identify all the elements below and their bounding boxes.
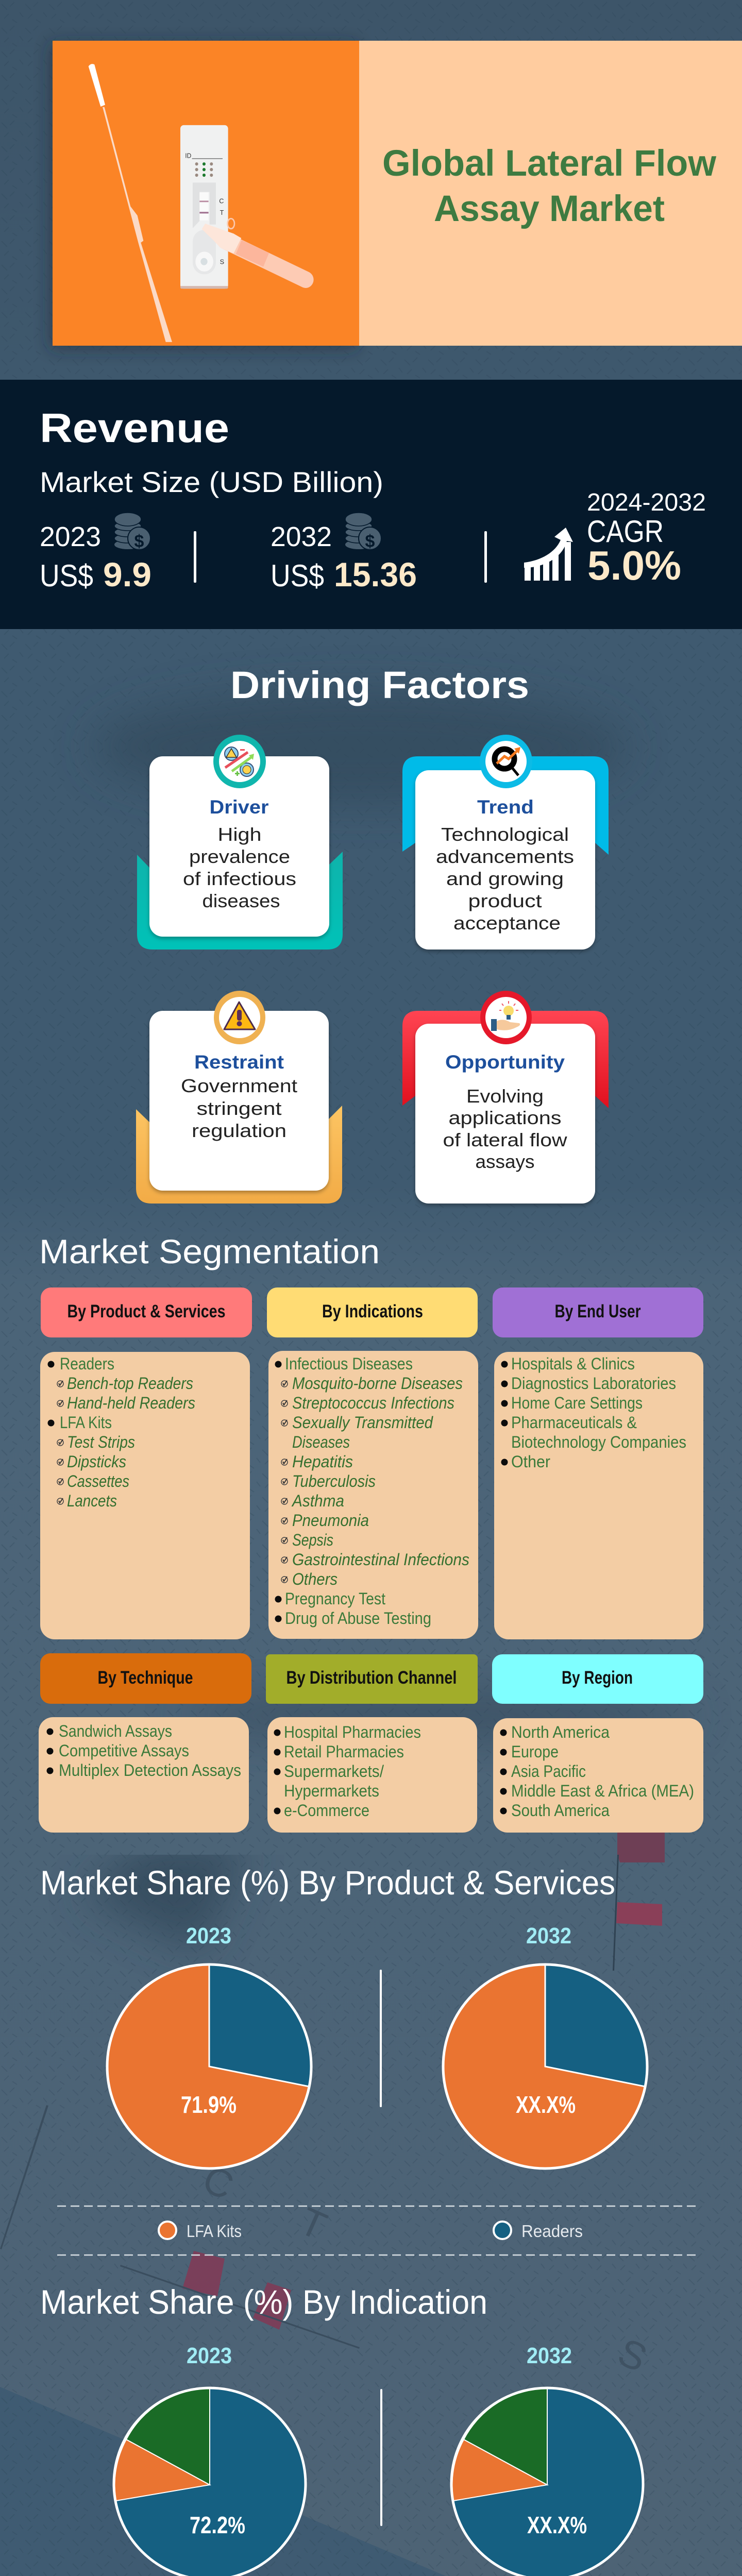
revenue 2023: 9.9	[103, 555, 151, 594]
indications list: Infectious Diseases	[285, 1354, 413, 1373]
indications list: Hepatitis	[292, 1452, 353, 1471]
revenue 2032: 2032	[271, 521, 332, 552]
indications list	[275, 1354, 469, 1628]
pie chart: product 2023: 71.9%	[181, 2091, 237, 2118]
restraint text: regulation	[192, 1120, 286, 1141]
heading: market segmentation: Market Segmentation	[39, 1232, 380, 1270]
region list: Middle East & Africa (MEA)	[511, 1782, 694, 1800]
product list: Hand-held Readers	[67, 1394, 195, 1412]
indications list: Pregnancy Test	[285, 1589, 385, 1608]
trend text: product	[468, 890, 542, 911]
hero title	[382, 143, 717, 229]
technique list: Competitive Assays	[59, 1741, 189, 1760]
trend text: Trend	[477, 796, 534, 818]
opportunity text: Evolving	[466, 1086, 544, 1107]
segment: by region: By Region	[562, 1668, 633, 1688]
hero title: Assay Market	[434, 189, 665, 229]
technique list: Multiplex Detection Assays	[59, 1761, 241, 1780]
indications list: Sexually Transmitted	[292, 1413, 433, 1432]
distribution list	[274, 1723, 421, 1820]
indications list: Diseases	[292, 1433, 350, 1451]
driver text: diseases	[202, 890, 280, 911]
pie chart: product 2032	[443, 1923, 647, 2168]
icon: hand with lightbulb	[480, 991, 532, 1044]
restraint text: stringent	[197, 1098, 281, 1119]
opportunity text: applications	[448, 1107, 562, 1128]
legend: product: LFA Kits	[187, 2222, 242, 2241]
pie chart: indication 2023	[114, 2343, 306, 2576]
trend text: and growing	[446, 868, 564, 889]
end user list: Diagnostics Laboratories	[511, 1374, 676, 1393]
revenue 2023: $	[134, 532, 144, 551]
trend text	[436, 796, 574, 934]
product list: Test Strips	[67, 1433, 135, 1451]
revenue 2032: US$	[271, 558, 324, 593]
revenue band	[0, 380, 742, 629]
indications list: Drug of Abuse Testing	[285, 1609, 431, 1628]
product list: Lancets	[67, 1492, 117, 1510]
indications list: Streptococcus Infections	[292, 1394, 454, 1412]
cagr: 5.0%	[587, 543, 681, 588]
icon: trend magnifier	[480, 735, 532, 788]
distribution list: Hypermarkets	[284, 1782, 379, 1800]
segment: by product and services	[40, 1287, 252, 1639]
product list	[47, 1354, 195, 1510]
technique list	[46, 1722, 241, 1780]
heading: market share by product: Market Share (%) By Product & Services	[40, 1863, 615, 1902]
segment: by indications: By Indications	[322, 1301, 423, 1321]
indications list: Others	[292, 1570, 338, 1588]
product list: Dipsticks	[67, 1452, 126, 1471]
revenue 2023: 2023	[40, 521, 101, 552]
cagr: 2024-2032	[587, 489, 706, 516]
trend text: advancements	[436, 846, 574, 867]
background texture upper	[0, 0, 742, 1855]
distribution list: e-Commerce	[284, 1801, 369, 1820]
indications list: Asthma	[291, 1492, 344, 1510]
segment: by product and services: By Product & Services	[67, 1301, 226, 1321]
background texture middle: S	[612, 2330, 653, 2381]
revenue 2032: $	[365, 532, 375, 551]
hero panel	[53, 41, 742, 346]
driver text: prevalence	[189, 846, 290, 867]
opportunity text: assays	[475, 1151, 535, 1172]
trend text: acceptance	[453, 912, 561, 934]
pie chart: product 2023	[107, 1923, 311, 2168]
segment: by region	[492, 1654, 703, 1833]
revenue 2032	[271, 513, 417, 594]
end user list	[501, 1354, 686, 1471]
indications list: Tuberculosis	[292, 1472, 376, 1490]
end user list: Pharmaceuticals &	[511, 1413, 637, 1432]
hero title: Global Lateral Flow	[382, 143, 717, 184]
indications list: Sepsis	[292, 1531, 333, 1549]
revenue 2023: US$	[40, 558, 93, 593]
cagr: CAGR	[587, 514, 664, 549]
driver text	[183, 796, 296, 911]
restraint text: Restraint	[194, 1052, 284, 1073]
hero image: orange photo with test cassette and swab: ID	[185, 152, 191, 160]
revenue 2032: 15.36	[334, 555, 417, 594]
end user list: Home Care Settings	[511, 1394, 643, 1412]
pie chart: indication 2023: 2023	[187, 2343, 232, 2368]
distribution list: Supermarkets/	[284, 1762, 384, 1781]
end user list: Other	[511, 1452, 550, 1471]
region list: South America	[511, 1801, 610, 1820]
card: restraint	[136, 991, 342, 1204]
segment: by indications	[267, 1287, 478, 1639]
legend: product: Readers	[521, 2222, 583, 2241]
hero image: orange photo with test cassette and swab: S	[220, 258, 224, 265]
heading: market share by indication: Market Share (%) By Indication	[40, 2283, 487, 2321]
indications list: Gastrointestinal Infections	[292, 1550, 469, 1569]
pie chart: product 2032: 2032	[526, 1923, 571, 1948]
background texture middle: T	[293, 2199, 333, 2249]
technique list: Sandwich Assays	[59, 1722, 172, 1740]
pie chart: indication 2032: 2032	[527, 2343, 572, 2368]
pie chart: indication 2032: XX.X%	[527, 2512, 587, 2538]
card: driver	[137, 735, 343, 950]
pie chart: indication 2032	[451, 2343, 643, 2576]
icon: warning triangle	[214, 991, 265, 1044]
segment: by end user: By End User	[554, 1301, 641, 1321]
revenue 2023	[40, 513, 151, 594]
restraint text	[181, 1052, 297, 1141]
icon: growth chart arrow	[524, 528, 573, 581]
segment: by distribution channel: By Distribution Channel	[286, 1668, 457, 1688]
opportunity text	[443, 1052, 568, 1172]
product list: LFA Kits	[60, 1413, 112, 1432]
distribution list: Retail Pharmacies	[284, 1742, 404, 1761]
indications list: Mosquito-borne Diseases	[292, 1374, 463, 1393]
trend text: Technological	[441, 824, 569, 845]
segment: by technique: By Technique	[98, 1668, 193, 1688]
pie chart: product 2023: 2023	[186, 1923, 231, 1948]
indications list: Pneumonia	[292, 1511, 369, 1530]
card: opportunity	[402, 991, 609, 1204]
region list: Asia Pacific	[511, 1762, 586, 1781]
driver text: of infectious	[183, 868, 296, 889]
opportunity text: of lateral flow	[443, 1129, 568, 1150]
end user list: Biotechnology Companies	[511, 1433, 686, 1451]
pie chart: indication 2023: 72.2%	[190, 2512, 245, 2538]
driver text: High	[217, 824, 262, 845]
background texture middle: C	[196, 2157, 240, 2209]
pie chart: product 2032: XX.X%	[516, 2091, 576, 2118]
opportunity text: Opportunity	[445, 1052, 565, 1073]
background texture middle	[0, 1844, 742, 2576]
segment: by distribution channel	[266, 1654, 478, 1833]
region list: Europe	[511, 1742, 559, 1761]
hero image: orange photo with test cassette and swab	[53, 41, 359, 346]
revenue heading: Revenue	[40, 405, 229, 451]
icon: driver arrows and gears	[213, 735, 266, 788]
card: trend	[402, 735, 609, 950]
cagr	[587, 489, 706, 588]
end user list: Hospitals & Clinics	[511, 1354, 635, 1373]
distribution list: Hospital Pharmacies	[284, 1723, 421, 1741]
segment: by end user	[493, 1287, 703, 1639]
heading: driving factors: Driving Factors	[230, 664, 529, 706]
driver text: Driver	[209, 796, 269, 818]
restraint text: Government	[181, 1075, 297, 1096]
hero image: orange photo with test cassette and swab: C	[219, 197, 224, 205]
product list: Readers	[60, 1354, 114, 1373]
product list: Cassettes	[67, 1472, 129, 1490]
product list: Bench-top Readers	[67, 1374, 193, 1393]
region list: North America	[511, 1723, 610, 1741]
legend: product	[159, 2222, 583, 2241]
region list	[500, 1723, 694, 1820]
market size subheading: Market Size (USD Billion)	[40, 466, 383, 498]
segment: by technique	[39, 1653, 251, 1833]
hero image: orange photo with test cassette and swab: T	[220, 209, 224, 216]
